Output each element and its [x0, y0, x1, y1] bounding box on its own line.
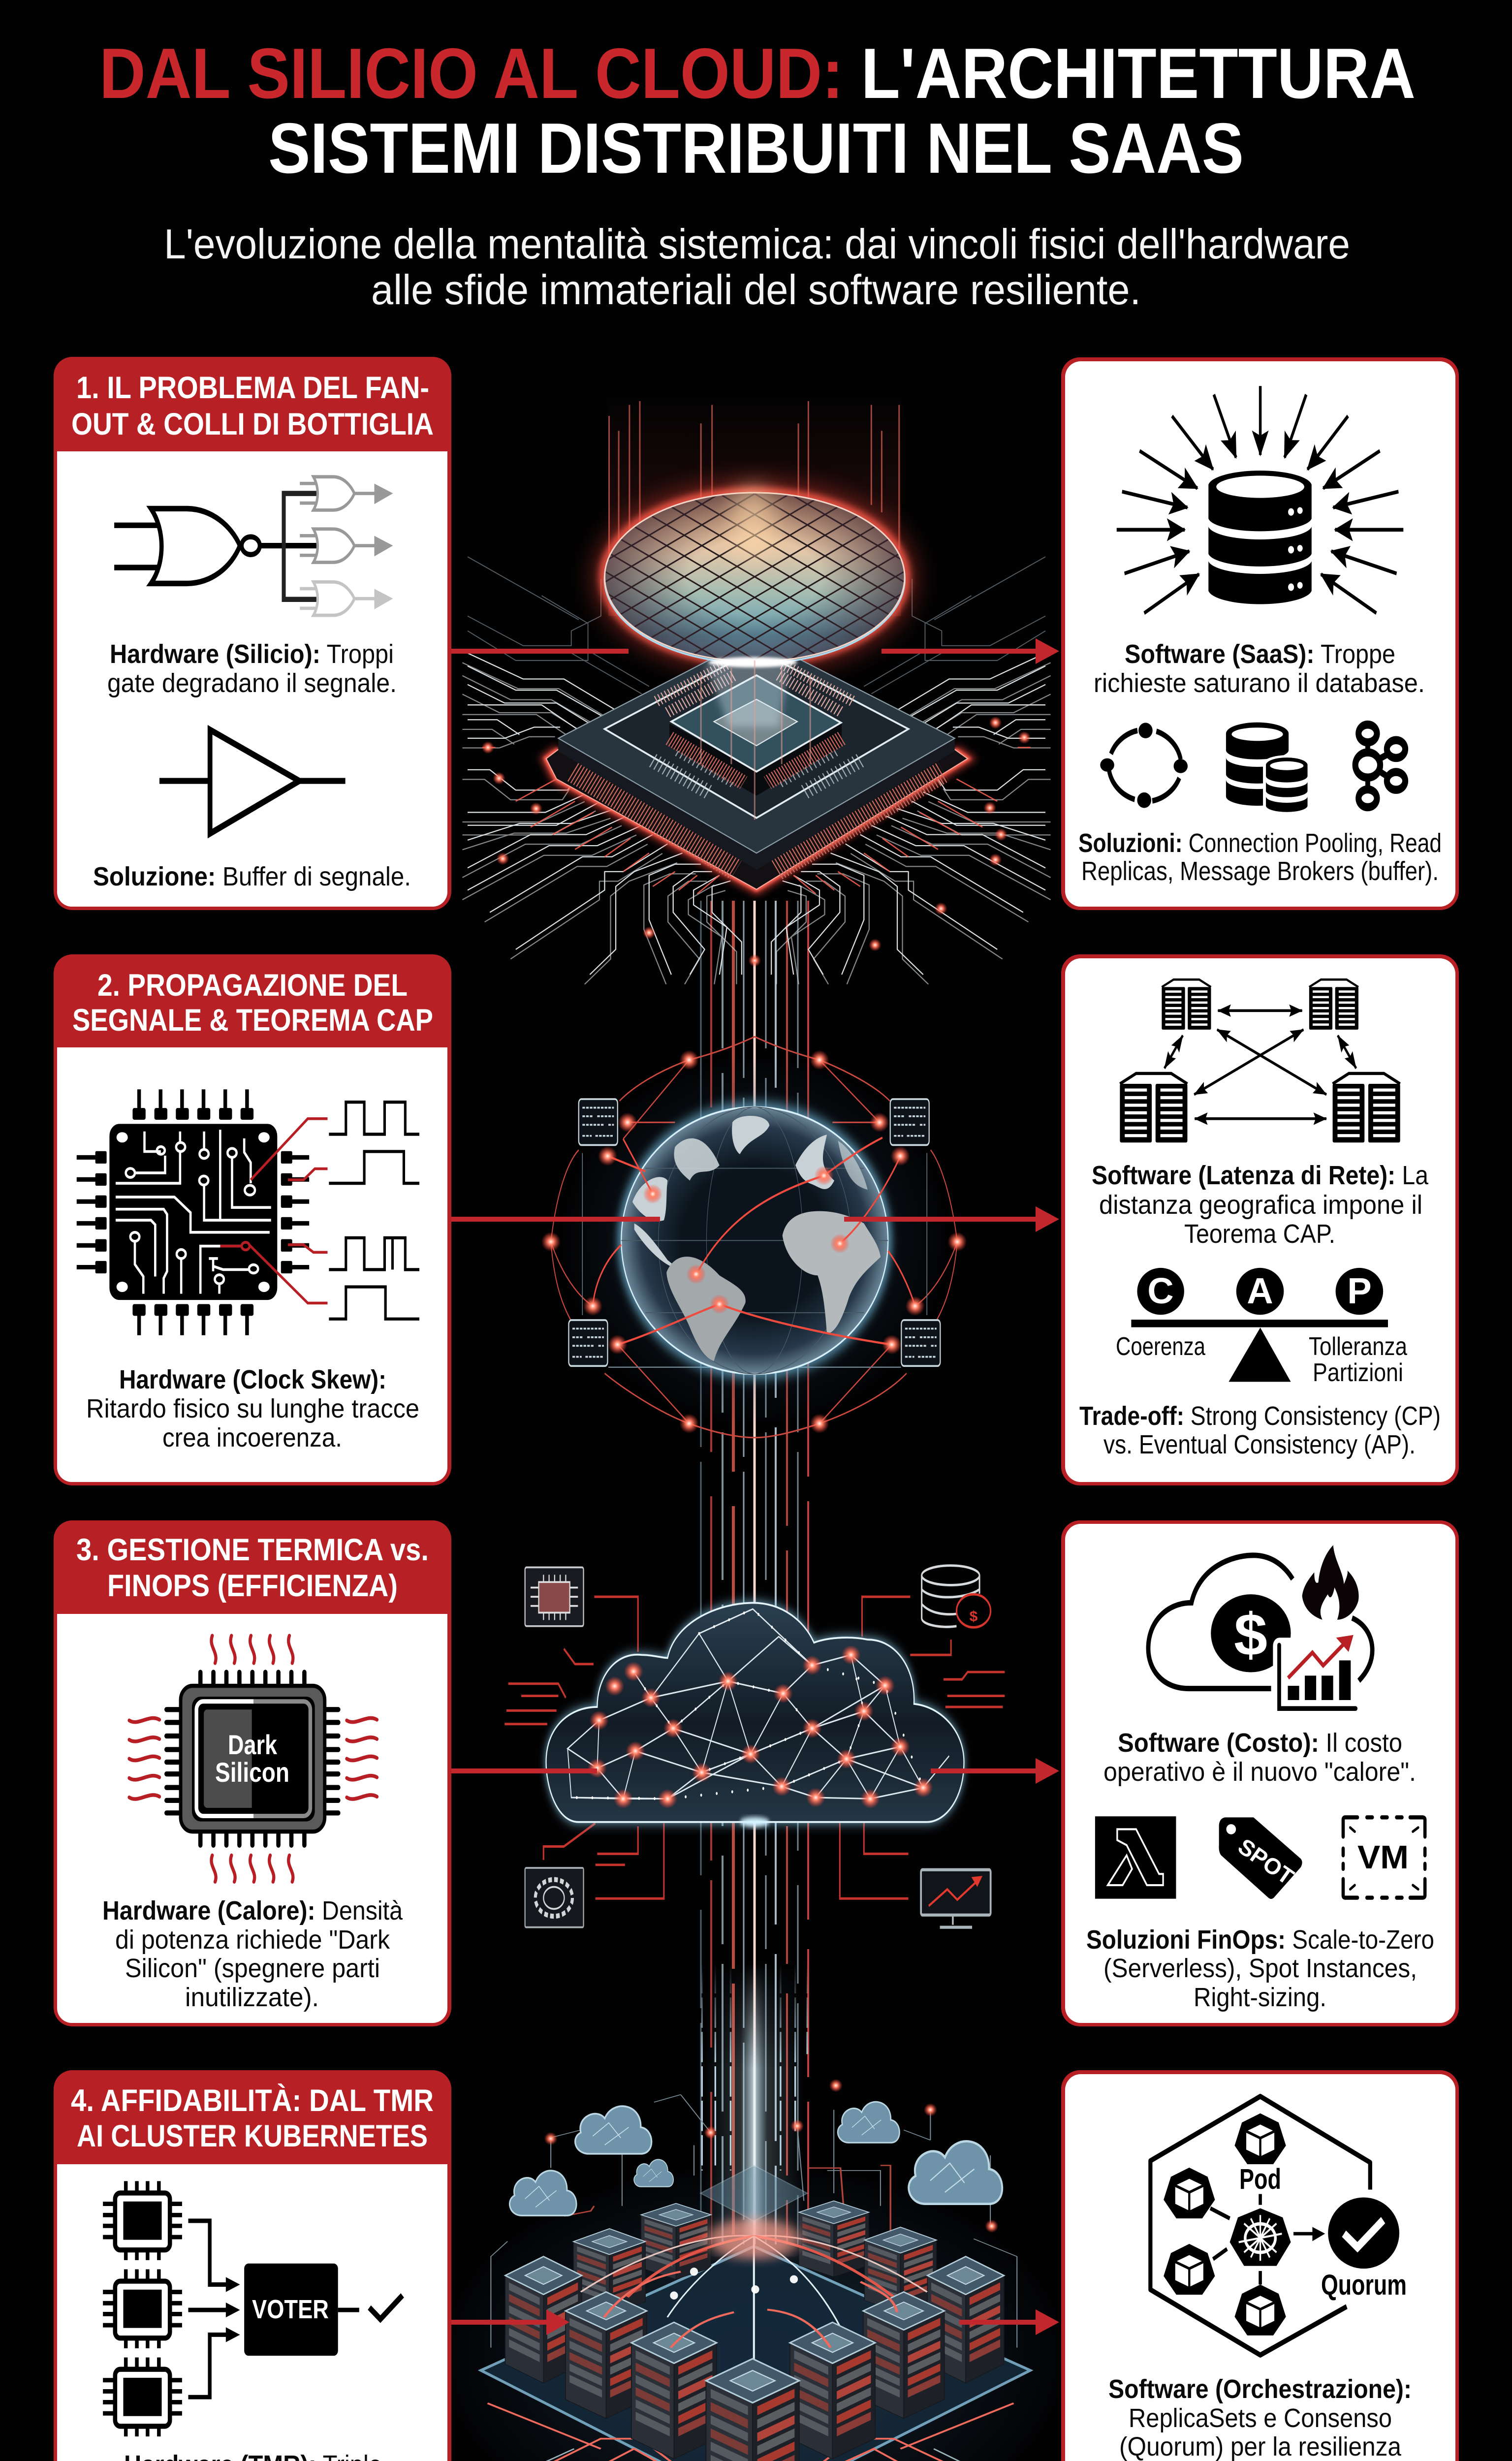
text: software: Software (SaaS): Troppe: [1125, 639, 1395, 669]
text: solutions: Soluzioni: Connection Pooling, Read: [1078, 828, 1442, 858]
panel: section 1 software: [1061, 357, 1459, 910]
server icons: [568, 1099, 940, 1366]
light beam: [705, 663, 790, 727]
outer links: [551, 1037, 957, 1438]
text: finops: Right-sizing.: [1194, 1983, 1326, 2012]
icon: kubernetes quorum: [1150, 2096, 1407, 2355]
text: hardware: Silicon" (spegnere parti: [125, 1954, 380, 1983]
icon: distributed servers: [1120, 979, 1400, 1142]
text: software: Software (Latenza di Rete): La: [1092, 1161, 1429, 1190]
icon: monitor chart: [921, 1870, 991, 1927]
icons: serverless, spot, vm: [1095, 1816, 1425, 1899]
heading: 1. IL PROBLEMA DEL FAN-: [76, 371, 429, 405]
text: hardware: crea incoerenza.: [162, 1423, 342, 1452]
icon: overloaded database: [1117, 386, 1403, 613]
glowing arcs: [581, 2218, 927, 2368]
text: trade-off: [1079, 1401, 1441, 1459]
wafer disc: [604, 486, 905, 663]
text: software: ReplicaSets e Consenso: [1129, 2403, 1392, 2433]
heading: 2. PROPAGAZIONE DEL: [97, 968, 408, 1003]
title: DAL SILICIO AL CLOUD: L'ARCHITETTURA: [99, 33, 1416, 113]
front racks: [566, 2272, 945, 2461]
panel: section 4 software: [1061, 2070, 1459, 2461]
panel: section 2 software: [1061, 954, 1459, 1485]
heading: [71, 2083, 434, 2153]
diagram: CAP balance: Coerenza: [1116, 1332, 1205, 1361]
icon: chip: [525, 1567, 584, 1626]
panel: section 3 software: [1061, 1520, 1459, 2026]
arrow row 2: [451, 1206, 1059, 1232]
subtitle: [164, 221, 1350, 314]
icon: triple modular redundancy: [103, 2181, 403, 2436]
heading: SEGNALE & TEOREMA CAP: [72, 1003, 433, 1038]
heading: 3. GESTIONE TERMICA vs.: [76, 1533, 429, 1567]
text: hardware: di potenza richiede "Dark: [115, 1925, 390, 1955]
panel: section 1 hardware: [54, 357, 451, 910]
text: solution: Soluzione: Buffer di segnale.: [93, 862, 411, 891]
diagram: CAP balance: C: [1147, 1270, 1174, 1311]
icon: kubernetes quorum: Pod: [1239, 2163, 1281, 2195]
heading: AI CLUSTER KUBERNETES: [77, 2119, 428, 2153]
text: software: [1103, 1728, 1416, 1787]
circuit traces: [462, 557, 1051, 984]
icon: cloud cost with flame and chart: [1148, 1545, 1372, 1714]
icon: kubernetes quorum: Quorum: [1321, 2269, 1407, 2301]
icon: triple modular redundancy: VOTER: [252, 2295, 329, 2324]
text: software: (Quorum) per la resilienza: [1119, 2432, 1402, 2461]
diagram: CAP balance: P: [1347, 1270, 1372, 1311]
subtitle: L'evoluzione della mentalità sistemica: dai vincoli fisici dell'hardware: [164, 221, 1350, 268]
text: solutions: Replicas, Message Brokers (buffer).: [1081, 856, 1439, 886]
text: hardware: Ritardo fisico su lunghe tracce: [86, 1394, 419, 1423]
continents: [632, 1116, 881, 1361]
data center illustration: [441, 1963, 1067, 2461]
globe sphere: [618, 1102, 892, 1379]
icon: dark silicon chip: [129, 1636, 377, 1882]
text: software: [1108, 2374, 1412, 2461]
text: finops: [1086, 1925, 1434, 2012]
chip package: [546, 636, 968, 889]
light beam: [702, 1963, 807, 2257]
arrows connecting panels: [451, 638, 1059, 2335]
globe network illustration: [504, 1037, 1005, 1927]
back racks: [505, 2201, 1004, 2383]
text: solutions: [1078, 828, 1442, 886]
heading: 4. AFFIDABILITÀ: DAL TMR: [71, 2083, 434, 2118]
dollar sign on cloud database icon: $: [970, 1609, 978, 1625]
clouds and links: [491, 2079, 1017, 2348]
trace nodes: [482, 717, 1031, 967]
icon: gear panel: [525, 1868, 584, 1927]
icons: serverless, spot, vm: SPOT: [1233, 1833, 1298, 1890]
panel: section 2 hardware: [54, 954, 451, 1485]
text: hardware: inutilizzate).: [185, 1983, 319, 2012]
floor circuits: [468, 2246, 1034, 2461]
text: hardware: Hardware (Silicio): Troppi: [110, 639, 394, 669]
diagram: CAP balance: Tolleranza: [1309, 1332, 1407, 1361]
subtitle: alle sfide immateriali del software resiliente.: [371, 267, 1141, 314]
arrow row 3: [451, 1758, 1059, 1784]
text: hardware: Hardware (Clock Skew):: [119, 1365, 386, 1394]
panel: section 4 hardware: [54, 2070, 451, 2461]
diagram: CAP balance: A: [1247, 1270, 1273, 1311]
title: SISTEMI DISTRIBUITI NEL SAAS: [268, 108, 1244, 188]
text: hardware: gate degradano il segnale.: [107, 668, 397, 698]
text: finops: Soluzioni FinOps: Scale-to-Zero: [1086, 1925, 1434, 1955]
icon: dark silicon chip: Silicon: [215, 1757, 289, 1788]
text: software: [1094, 639, 1425, 698]
icon: cloud cost with flame and chart: $: [1234, 1601, 1267, 1668]
heading: OUT & COLLI DI BOTTIGLIA: [71, 407, 434, 442]
text: hardware: Hardware (Calore): Densità: [102, 1896, 403, 1925]
network links on globe: [593, 1137, 915, 1345]
heading: [76, 1533, 429, 1603]
text: software: Software (Orchestrazione):: [1108, 2374, 1412, 2404]
text: hardware: [86, 1365, 419, 1452]
text: hardware: [107, 639, 397, 698]
red nodes: [541, 1050, 967, 1433]
vertical signal strands: [701, 901, 808, 2244]
arrow row 4: [451, 2309, 1059, 2335]
text: software: richieste saturano il database.: [1094, 668, 1425, 698]
heading: [71, 371, 434, 442]
text: hardware: [102, 1896, 403, 2012]
arrow row 1: [451, 638, 1059, 664]
icons: pooling, replicas, broker: [1100, 723, 1405, 815]
text: software: operativo è il nuovo "calore".: [1103, 1757, 1416, 1787]
panel: section 3 hardware: [54, 1520, 451, 2026]
icon: fan-out logic gates: [114, 477, 390, 615]
text: software: [1092, 1161, 1429, 1249]
heading: FINOPS (EFFICIENZA): [107, 1569, 398, 1603]
cloud: [546, 1603, 964, 1827]
icon: buffer: [159, 730, 346, 833]
icon: database with dollar: [922, 1566, 991, 1627]
text: software: Software (Costo): Il costo: [1118, 1728, 1402, 1758]
heading: [72, 968, 433, 1038]
text: trade-off: vs. Eventual Consistency (AP).: [1103, 1430, 1416, 1459]
text: software: Teorema CAP.: [1184, 1219, 1335, 1249]
text: software: distanza geografica impone il: [1099, 1190, 1422, 1220]
wafer glow: [601, 489, 909, 665]
icon: clock skew chip: [77, 1089, 419, 1335]
text: finops: (Serverless), Spot Instances,: [1103, 1954, 1417, 1983]
icon: dark silicon chip: Dark: [228, 1729, 278, 1760]
diagram: CAP balance: Partizioni: [1313, 1358, 1403, 1387]
wafer and processor illustration: [462, 394, 1051, 984]
title: [99, 33, 1416, 188]
icon connectors around cloud: [504, 1597, 1005, 1898]
diagram: CAP balance: [1116, 1268, 1407, 1387]
text: trade-off: Trade-off: Strong Consistency (CP): [1079, 1401, 1441, 1431]
icons: serverless, spot, vm: VM: [1357, 1839, 1409, 1876]
